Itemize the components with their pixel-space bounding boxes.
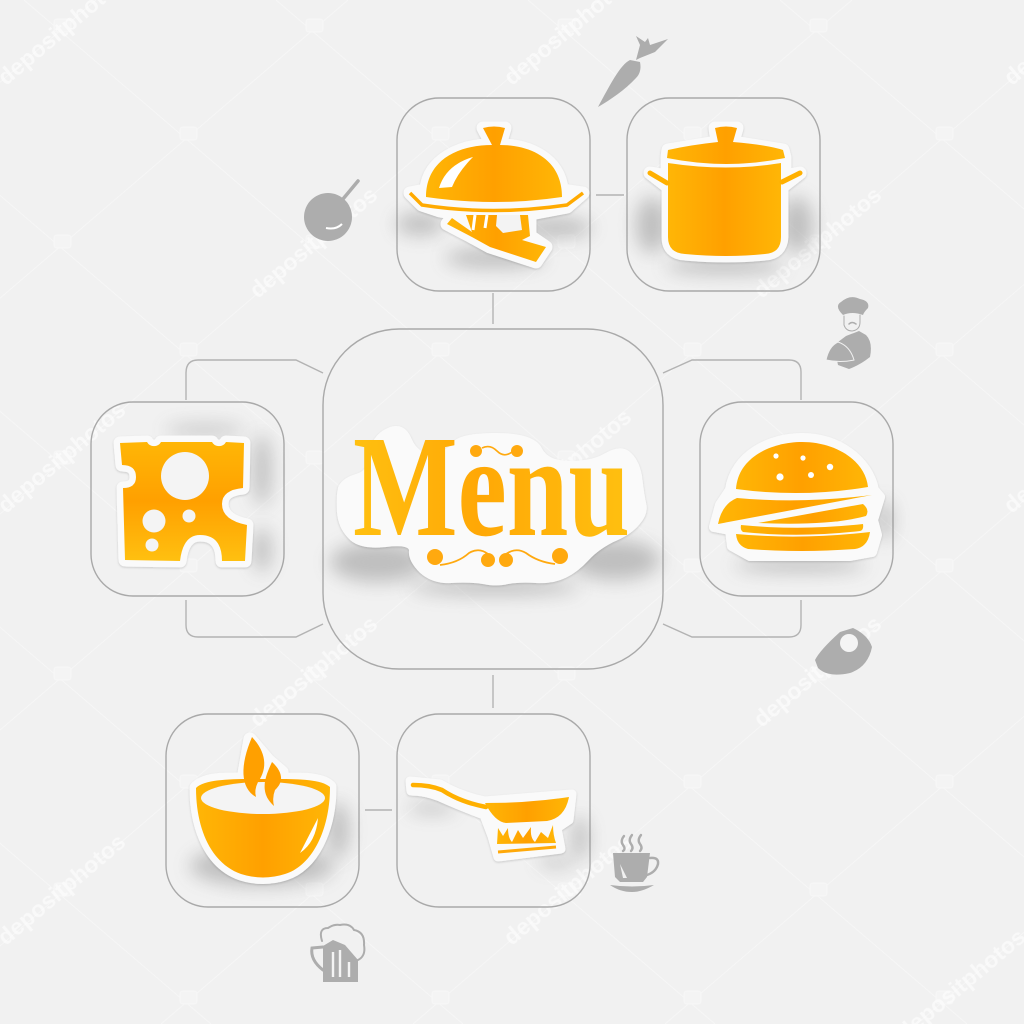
icon: steaming bowl sticker	[190, 737, 349, 886]
panel: cheese	[91, 402, 284, 596]
icon: grey beer mug	[312, 925, 364, 982]
icon: cheese sticker	[120, 425, 271, 572]
icon: pan on burner sticker	[408, 781, 588, 867]
icon: cooking pot sticker	[636, 126, 813, 274]
panel: cloche	[396, 98, 592, 291]
icon: cloche on hand sticker	[396, 126, 592, 268]
title: Menu: Menu	[353, 407, 630, 567]
panel: soup bowl	[166, 714, 359, 907]
ornament: top flourish	[470, 445, 523, 457]
watermark text: depositphotos	[748, 610, 886, 732]
watermark text: depositphotos	[244, 181, 382, 303]
icon: burger sticker	[714, 438, 892, 572]
icon: grey coffee cup	[610, 835, 658, 892]
watermark text: depositphotos	[748, 181, 886, 303]
watermark text: depositphotos	[498, 403, 636, 525]
icon: grey carrot	[598, 36, 668, 107]
watermark text: depositphotos	[244, 610, 382, 732]
sticker: menu lettering	[330, 407, 660, 595]
connectors between panels	[186, 195, 801, 810]
icon: grey frying pan	[304, 181, 358, 241]
icon: grey blob with hole	[815, 628, 872, 675]
ornament: bottom flourish	[427, 548, 568, 567]
panel: burger	[700, 402, 893, 596]
panel: menu centre	[323, 329, 663, 669]
icon: grey chef with cloche	[826, 297, 871, 369]
panel: frying pan	[397, 714, 590, 907]
panel: pot	[627, 98, 820, 291]
watermark text: depositphotos	[498, 828, 636, 950]
